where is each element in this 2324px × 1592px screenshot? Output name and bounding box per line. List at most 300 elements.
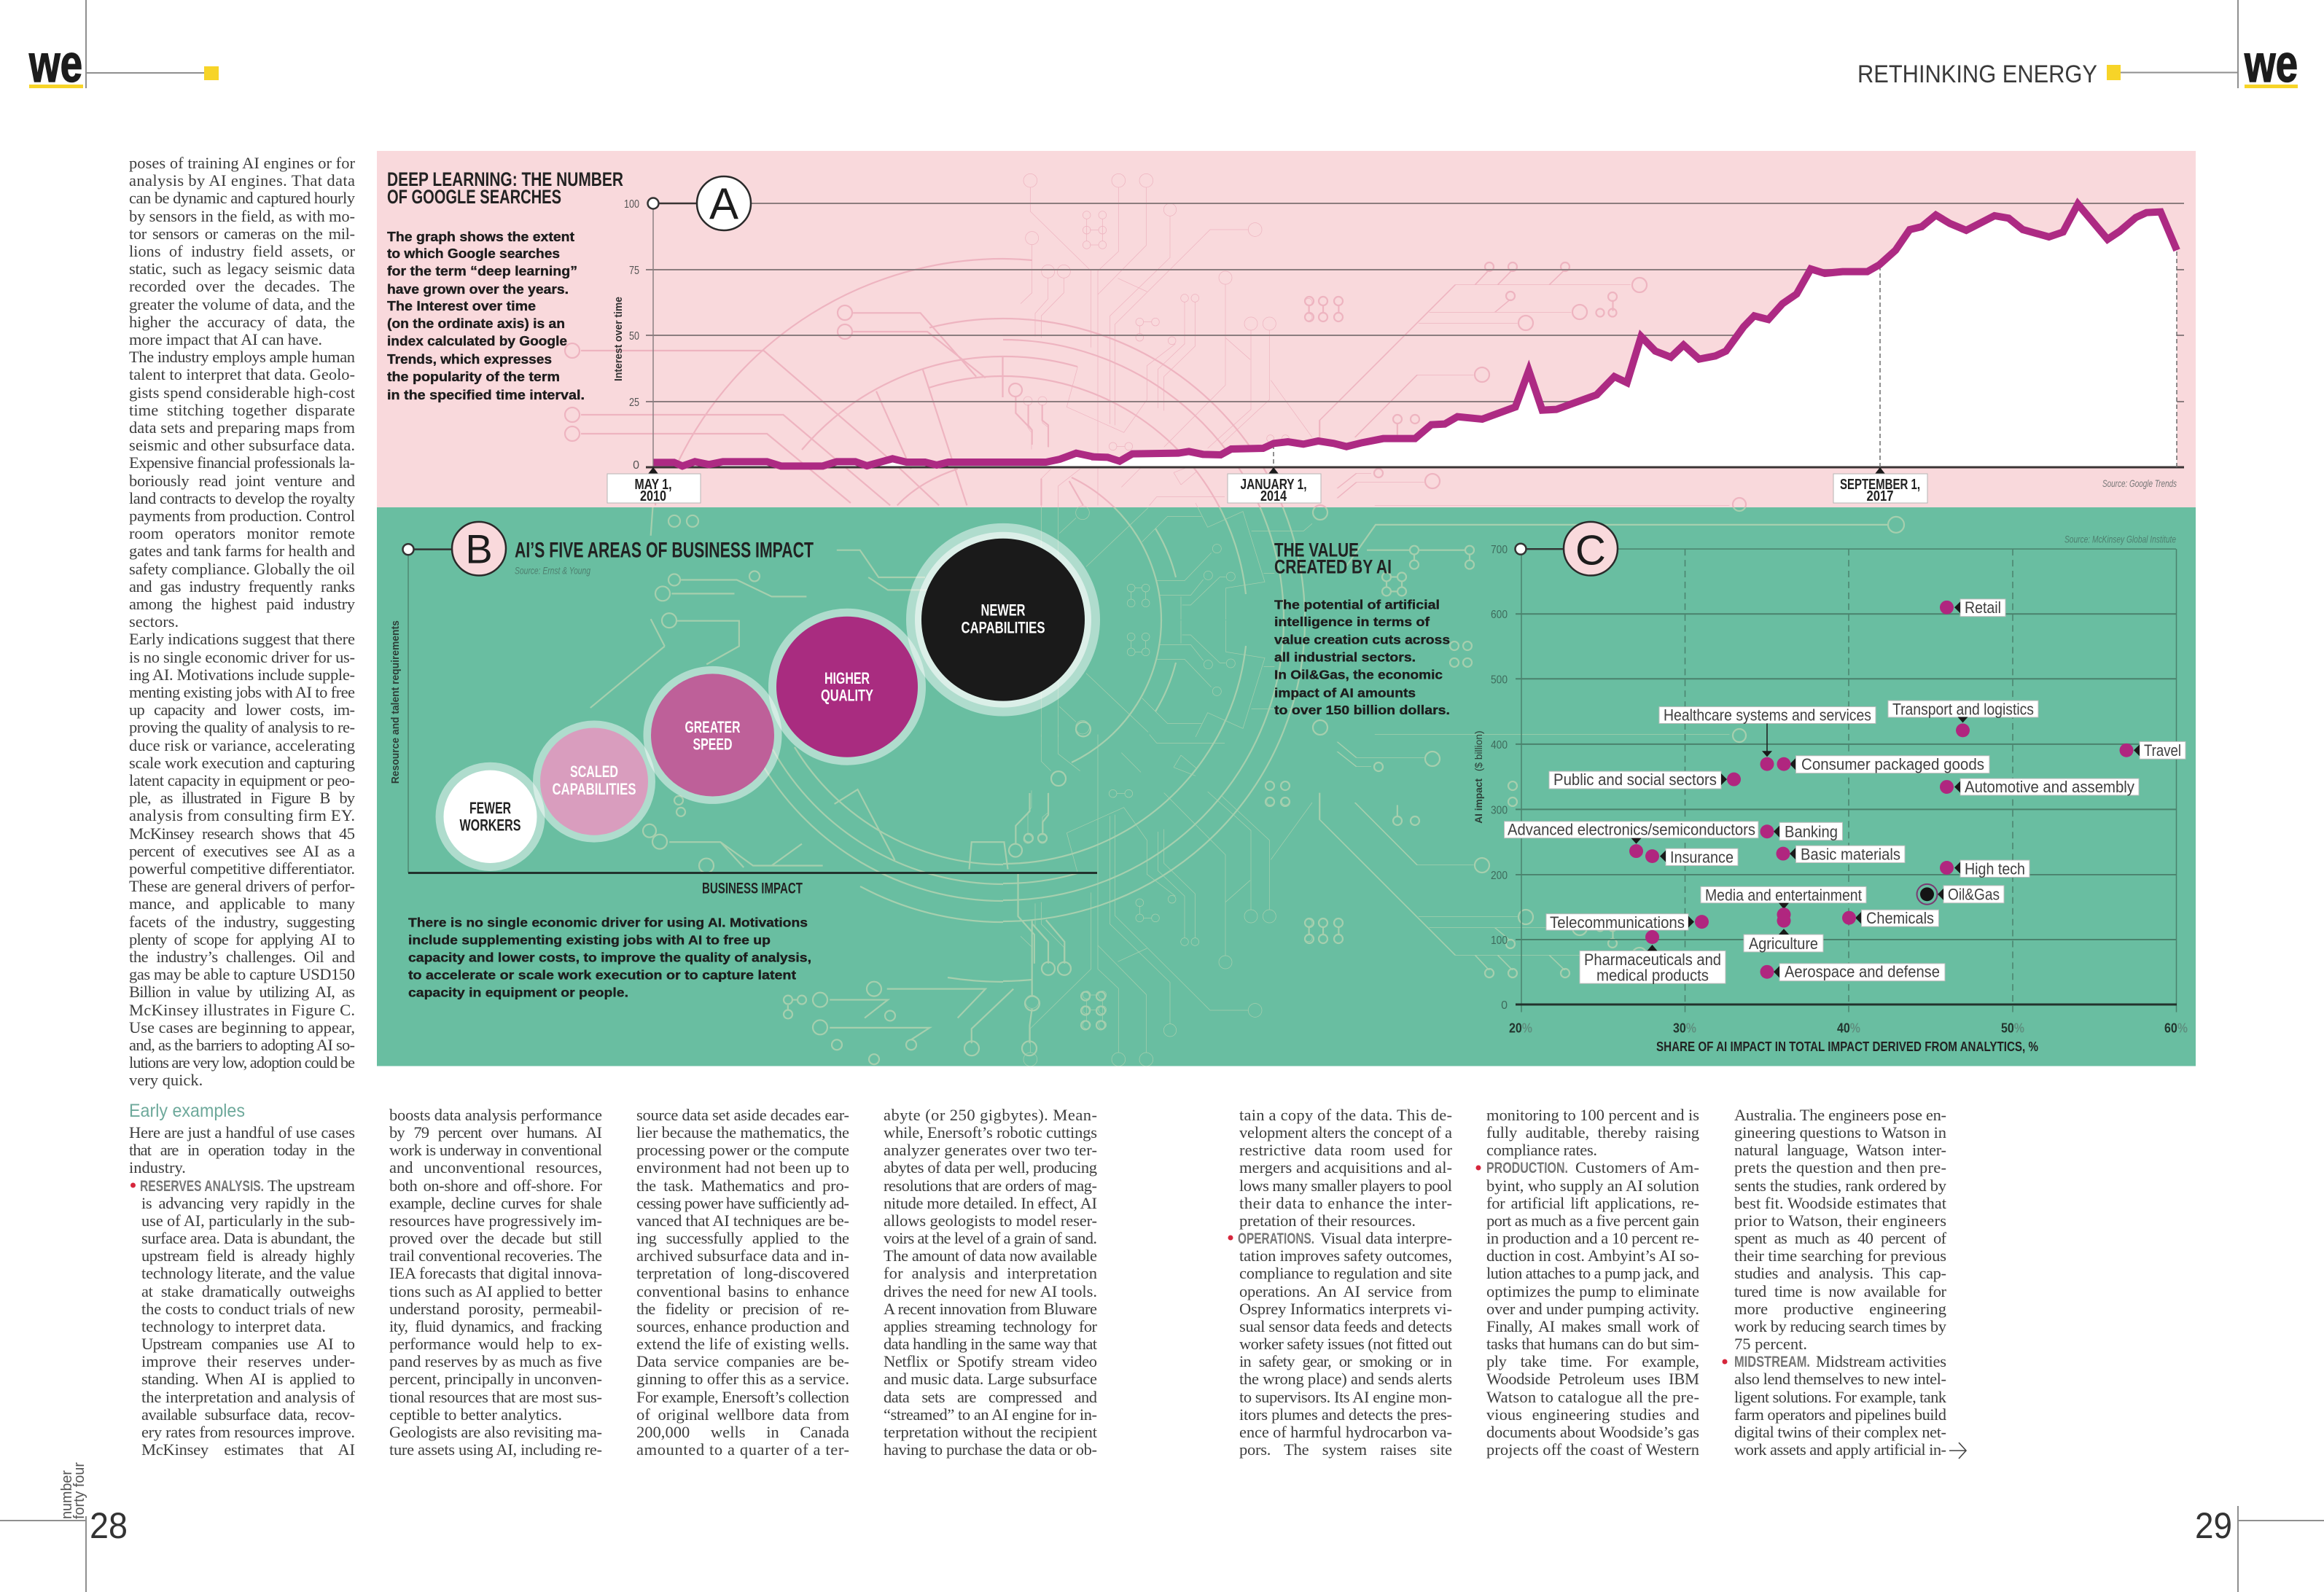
- text column 6: Watson to catalogue all the pre-: [1486, 1388, 1699, 1406]
- text column 2: work is underway in conventional: [389, 1141, 602, 1159]
- text column 3: cessing power have sufficiently ad-: [636, 1194, 849, 1212]
- date label: May 1, 2010: [607, 467, 701, 504]
- text column 1, upper: recorded over the decades. The: [129, 277, 355, 295]
- text column 2: proved over the decade but still: [389, 1229, 602, 1247]
- chart C data labels: medical products: [1596, 967, 1709, 985]
- text column 2: ture assets using AI, including re-: [389, 1440, 602, 1459]
- text column 5: Visual data interpre-: [1320, 1229, 1452, 1247]
- chart C data labels: Aerospace and defense: [1785, 963, 1940, 981]
- text column 1, upper: proving the quality of analysis to re-: [129, 718, 355, 736]
- chart A description text: The Interest over time: [387, 299, 536, 313]
- chart B source note: Source: Ernst & Young: [515, 565, 590, 577]
- chart C data labels: Transport and logistics: [1892, 701, 2034, 719]
- text column 1, lower: that are in operation today in the: [129, 1141, 355, 1159]
- chart A marker circle: [647, 176, 751, 230]
- text column 2: resources have progressively im-: [389, 1211, 602, 1230]
- text column 1, upper: and gas industry frequently ranks: [129, 577, 355, 596]
- text column 6: documents about Woodside’s gas: [1486, 1423, 1699, 1441]
- text column 1, lower: use of AI, particularly in the sub-: [141, 1211, 355, 1230]
- text column 7: digital twins of their complex net-: [1734, 1423, 1946, 1441]
- circuit pattern on pink panel: [565, 173, 1746, 620]
- text column 2: tional resources that are most sus-: [389, 1388, 602, 1406]
- chart C x tick labels: 60%: [2164, 1021, 2188, 1036]
- text column 1, upper: tor sensors or cameras on the mil-: [129, 225, 355, 243]
- text column 7: more productive engineering: [1734, 1300, 1946, 1318]
- chart B description text: [408, 916, 811, 1000]
- chart C heading: [1274, 539, 1392, 577]
- chart A heading: [387, 168, 623, 208]
- text column 7: MIDSTREAM.: [1734, 1354, 1810, 1370]
- chart C highlighted point: oil and gas: [1917, 884, 1938, 905]
- chart B description text: There is no single economic driver for using AI. Motivations: [408, 916, 808, 930]
- text column 4: and music data. Large subsurface: [884, 1370, 1097, 1388]
- chart A description text: (on the ordinate axis) is an: [387, 316, 565, 331]
- text column 1, upper: menting existing jobs with AI to free: [129, 683, 355, 701]
- text column 2: ity, fluid dynamics, and fracking: [389, 1317, 602, 1335]
- text column 1, lower: [129, 1123, 356, 1459]
- chart B description text: to accelerate or scale work execution or to capture latent: [408, 968, 796, 983]
- text column 5: in safety gear, or smoking or in: [1239, 1352, 1452, 1370]
- left footer: issue label, page number 28: forty four: [71, 1462, 87, 1519]
- text column 2: percent, principally in unconven-: [389, 1370, 602, 1388]
- chart A description text: have grown over the years.: [387, 282, 569, 297]
- chart C description text: The potential of artificial: [1274, 597, 1440, 612]
- bubble: newer capabilities: CAPABILITIES: [961, 619, 1045, 637]
- text column 1, upper: plenty of scope for applying AI to: [129, 930, 355, 948]
- chart C description text: In Oil&Gas, the economic: [1274, 667, 1443, 682]
- text column 1, upper: lions of industry field assets, or: [129, 242, 356, 260]
- text column 1, upper: static, such as legacy seismic data: [129, 260, 355, 278]
- chart A heading: OF GOOGLE SEARCHES: [387, 186, 561, 208]
- text column 1, lower: technology literate, and the value: [141, 1264, 355, 1282]
- chart A description text: to which Google searches: [387, 246, 560, 261]
- text column 2: trail conventional recoveries. The: [389, 1246, 602, 1265]
- text column 7: sents the studies, rank ordered by: [1734, 1177, 1947, 1195]
- text column 1, upper: gates and tank farms for health and: [129, 542, 355, 560]
- text column 1, upper: is no single economic driver for us-: [129, 648, 355, 666]
- chart A y tick labels: 75: [629, 265, 639, 277]
- text column 1, lower: surface area. Data is abundant, the: [141, 1229, 355, 1247]
- text column 6: monitoring to 100 percent and is: [1486, 1106, 1699, 1124]
- text column 1, lower: the costs to conduct trials of new: [141, 1300, 356, 1318]
- text column 7: farm operators and pipelines build: [1734, 1405, 1946, 1424]
- text column 1, upper: payments from production. Control: [129, 507, 355, 525]
- text column 1, upper: and, as the barriers to adopting AI so-: [129, 1036, 355, 1054]
- chart A data line: [654, 204, 2177, 466]
- text column 1, upper: very quick.: [129, 1071, 203, 1089]
- text column 6: optimizes the pump to eliminate: [1486, 1282, 1699, 1300]
- text column 3: of original wellbore data from: [636, 1405, 849, 1424]
- text column 3: ing successfully applied to the: [636, 1229, 849, 1247]
- text column 5: Osprey Informatics interprets vi-: [1239, 1300, 1452, 1318]
- date label: January 1, 2014: [1228, 467, 1321, 504]
- chart C description text: intelligence in terms of: [1274, 614, 1430, 629]
- chart C y axis title: AI impact: [1473, 779, 1484, 824]
- right header: section title, logo and rule: [1857, 0, 2298, 93]
- date label: January 1, 2014: 2014: [1260, 488, 1287, 504]
- text column 1, lower: upstream field is already highly: [141, 1246, 356, 1265]
- text column 7: work by reducing search times by: [1734, 1317, 1947, 1335]
- text column 1, upper: talent to interpret that data. Geolo-: [129, 365, 355, 383]
- text column 2: IEA forecasts that digital innova-: [389, 1264, 602, 1282]
- text column 6: tasks that humans can do but sim-: [1486, 1335, 1699, 1353]
- text column 1, upper: safety compliance. Globally the oil: [129, 560, 355, 578]
- chart A y tick labels: 100: [624, 198, 639, 211]
- text column 1, upper: among the highest paid industry: [129, 595, 356, 613]
- bubble: newer capabilities: NEWER: [980, 601, 1026, 620]
- chart C x tick labels: 20%: [1509, 1021, 1532, 1036]
- arrow: text continues: [1949, 1443, 1966, 1459]
- chart C data labels: Healthcare systems and services: [1664, 706, 1871, 724]
- chart A description text: [387, 230, 585, 402]
- left footer: issue label, page number 28: number: [59, 1470, 75, 1519]
- chart A y tick labels: 25: [629, 397, 639, 409]
- text column 3: conventional basins to enhance: [636, 1282, 849, 1300]
- text column 5: mergers and acquisitions and al-: [1239, 1158, 1452, 1177]
- text column 1, upper: The industry employs ample human: [129, 348, 355, 366]
- chart C data labels: Travel: [2144, 741, 2181, 760]
- chart B heading: AI’S FIVE AREAS OF BUSINESS IMPACT: [515, 539, 814, 563]
- text column 1, lower: McKinsey estimates that AI: [141, 1440, 355, 1459]
- chart A heading: DEEP LEARNING: THE NUMBER: [387, 168, 623, 190]
- text column 1, upper: Use cases are beginning to appear,: [129, 1018, 355, 1037]
- text column 1, lower: Here are just a handful of use cases: [129, 1123, 355, 1142]
- bubble: higher quality: QUALITY: [821, 687, 873, 705]
- bubble: greater speed: [643, 666, 781, 804]
- text column 4: abytes of data per well, producing: [884, 1158, 1097, 1177]
- text column 5: velopment alters the concept of a: [1239, 1123, 1452, 1142]
- text column 4: The amount of data now available: [884, 1246, 1097, 1265]
- text column 6: over and under pumping activity.: [1486, 1300, 1699, 1318]
- text column 1, lower: technology to interpret data.: [141, 1317, 326, 1335]
- left footer: issue label, page number 28: [0, 1462, 128, 1592]
- chart C heading: THE VALUE: [1274, 539, 1359, 561]
- text column 3: environment had not been up to: [636, 1158, 849, 1177]
- text column 6: Customers of Am-: [1575, 1158, 1699, 1177]
- text column 1, lower: ery rates from resources improve.: [141, 1423, 355, 1441]
- chart C y tick labels: 100: [1491, 934, 1508, 947]
- chart C data labels: Advanced electronics/semiconductors: [1508, 821, 1755, 839]
- text column 5: [1228, 1106, 1453, 1459]
- text column 7: Australia. The engineers pose en-: [1734, 1106, 1946, 1124]
- text column 7: prior to Watson, their engineers: [1734, 1211, 1946, 1230]
- text column 7: gineering questions to Watson in: [1734, 1123, 1946, 1142]
- chart A y tick labels: 50: [629, 330, 639, 343]
- text column 1, upper: data sets and preparing maps from: [129, 418, 355, 437]
- bubble: greater speed: SPEED: [693, 735, 732, 753]
- text column 1, upper: poses of training AI engines or for: [129, 154, 356, 172]
- right header: section title, logo and rule: RETHINKING ENERGY: [1857, 61, 2097, 88]
- chart C y tick labels: 700: [1491, 544, 1508, 556]
- text column 5: compliance to regulation and site: [1239, 1264, 1452, 1282]
- text column 1, upper: ple, as illustrated in Figure B by: [129, 789, 356, 807]
- text column 1, upper: [129, 154, 356, 1089]
- bubble: scaled capabilities: [533, 720, 655, 843]
- chart A date guide lines: [1274, 251, 2177, 467]
- text column 5: the wrong place) and sends alerts: [1239, 1370, 1452, 1388]
- chart B marker circle: [402, 522, 506, 576]
- chart C marker circle: C: [1575, 528, 1606, 574]
- text column 5: sual sensor data feeds and detects: [1239, 1317, 1452, 1335]
- text column 6: in production and a 10 percent re-: [1486, 1229, 1699, 1247]
- chart B y axis title: Resource and talent requirements: [389, 620, 402, 784]
- chart A axes: [646, 203, 2184, 467]
- chart A area fill: [654, 204, 2177, 467]
- chart A description text: in the specified time interval.: [387, 388, 585, 402]
- chart C data labels: Media and entertainment: [1705, 886, 1862, 904]
- panel: green chart background: [377, 507, 2196, 1066]
- text column 1, upper: McKinsey research shows that 45: [129, 824, 355, 843]
- chart B description text: include supplementing existing jobs with AI to free up: [408, 932, 771, 947]
- left footer: issue label, page number 28: 28: [90, 1505, 128, 1546]
- right footer: page number 29: 29: [2195, 1505, 2232, 1546]
- text column 1, upper: gists spend considerable high-cost: [129, 383, 356, 402]
- left header: logo and rule: we: [28, 35, 82, 93]
- text column 3: processing power or the compute: [636, 1141, 849, 1159]
- text column 1, upper: analysis by AI engines. That data: [129, 171, 355, 190]
- chart C y tick labels: [1491, 544, 1508, 1012]
- text column 1, lower: is advancing very rapidly in the: [141, 1194, 355, 1212]
- chart C description text: all industrial sectors.: [1274, 649, 1416, 664]
- text column 5: tain a copy of the data. This de-: [1239, 1106, 1452, 1124]
- chart C data labels: Automotive and assembly: [1965, 778, 2134, 796]
- text column 1, upper: ing AI. Motivations include supple-: [129, 666, 355, 684]
- chart C y tick labels: 600: [1491, 609, 1508, 621]
- text column 2: both on-shore and off-shore. For: [389, 1177, 602, 1195]
- chart C x axis title: SHARE OF AI IMPACT IN TOTAL IMPACT DERIVED FROM ANALYTICS, %: [1656, 1039, 2038, 1055]
- chart C data labels: Insurance: [1670, 848, 1734, 867]
- chart C y tick labels: 200: [1491, 870, 1508, 882]
- text column 2: ceptible to better analytics.: [389, 1405, 562, 1424]
- chart C heading: CREATED BY AI: [1274, 556, 1392, 577]
- chart B: five areas of business impact: [389, 522, 1100, 897]
- text column 3: terpretation of long-discovered: [636, 1264, 849, 1282]
- text column 4: “streamed” to an AI engine for in-: [884, 1405, 1097, 1424]
- text column 1, upper: analysis from consulting firm EY.: [129, 806, 355, 824]
- bubble: fewer workers: FEWER: [469, 799, 511, 817]
- text column 5: tation improves safety outcomes,: [1239, 1246, 1452, 1265]
- text column 2: and unconventional resources,: [389, 1158, 602, 1177]
- text column 3: Data service companies are be-: [636, 1352, 849, 1370]
- text column 6: Finally, AI makes small work of: [1486, 1317, 1700, 1335]
- bubble: scaled capabilities: SCALED: [570, 762, 618, 781]
- text column 4: Netflix or Spotify stream video: [884, 1352, 1097, 1370]
- text column 2: tions such as AI applied to better: [389, 1282, 602, 1300]
- chart C data labels: Public and social sectors: [1553, 770, 1717, 789]
- text column 1, upper: mance, and applicable to many: [129, 894, 356, 913]
- text column 1, upper: percent of executives see AI as a: [129, 842, 355, 860]
- text column 3: [636, 1106, 849, 1459]
- chart A source note: Source: Google Trends: [2102, 477, 2177, 489]
- chart C leader arrows: [1631, 601, 2140, 978]
- subheading: Early examples: Early examples: [129, 1101, 245, 1121]
- text column 5: pretation of their resources.: [1239, 1211, 1416, 1230]
- text column 1, lower: at stake dramatically outweighs: [141, 1282, 355, 1300]
- chart C grid: [1516, 549, 2177, 1012]
- text column 4: drives the need for new AI tools.: [884, 1282, 1097, 1300]
- text column 1, upper: latent capacity in equipment or peo-: [129, 771, 355, 789]
- chart C y tick labels: 0: [1501, 999, 1508, 1012]
- text column 6: for artificial lift applications, re-: [1486, 1194, 1699, 1212]
- text column 4: nitude more detailed. In effect, AI: [884, 1194, 1097, 1212]
- chart C x tick labels: 50%: [2001, 1021, 2024, 1036]
- chart C description text: value creation cuts across: [1274, 633, 1450, 647]
- text column 6: vious engineering studies and: [1486, 1405, 1699, 1424]
- text column 1, lower: improve their reserves under-: [141, 1352, 355, 1370]
- text column 6: fully auditable, thereby raising: [1486, 1123, 1699, 1142]
- chart C description text: to over 150 billion dollars.: [1274, 703, 1450, 717]
- text column 5: restrictive data room used for: [1239, 1141, 1452, 1159]
- text column 1, upper: Early indications suggest that there: [129, 630, 355, 648]
- text column 1, upper: greater the volume of data, and the: [129, 295, 355, 313]
- date label: September 1, 2017: [1833, 467, 1927, 504]
- chart C zero axis: [1516, 1004, 2177, 1006]
- chart A y axis title: Interest over time: [612, 297, 625, 381]
- bubble: fewer workers: WORKERS: [459, 816, 520, 835]
- text column 1, lower: Upstream companies use AI to: [141, 1335, 355, 1353]
- chart B x axis title: BUSINESS IMPACT: [702, 880, 803, 897]
- text column 5: OPERATIONS.: [1238, 1230, 1314, 1247]
- text column 6: [1475, 1106, 1700, 1459]
- date label: January 1, 2014: JANUARY 1,: [1241, 477, 1306, 493]
- bubble: greater speed: GREATER: [685, 718, 741, 736]
- chart C data labels: High tech: [1965, 859, 2025, 878]
- text column 3: lier because the mathematics, the: [636, 1123, 849, 1142]
- chart C y tick labels: 500: [1491, 674, 1508, 686]
- text column 1, upper: by sensors in the field, as with mo-: [129, 207, 355, 225]
- text column 7: prets the question and then pre-: [1734, 1158, 1946, 1177]
- chart C data labels: Retail: [1965, 598, 2001, 617]
- chart B marker circle: B: [465, 526, 493, 572]
- text column 1, upper: time stitching together disparate: [129, 401, 355, 419]
- chart A grid lines: [646, 203, 2184, 402]
- text column 1, upper: more impact that AI can have.: [129, 330, 322, 348]
- text column 1, upper: higher the accuracy of data, the: [129, 313, 355, 331]
- panel: pink chart background: [377, 151, 2196, 507]
- text column 2: Geologists are also revisiting ma-: [389, 1423, 602, 1441]
- text column 2: pand reserves by as much as five: [389, 1352, 602, 1370]
- text column 1, upper: boriously read joint venture and: [129, 472, 355, 490]
- date label: May 1, 2010: 2010: [640, 488, 666, 504]
- text column 1, upper: the industry’s challenges. Oil and: [129, 948, 355, 966]
- text column 5: operations. An AI service from: [1239, 1282, 1452, 1300]
- chart A marker circle: A: [709, 179, 738, 228]
- text column 5: pors. The system raises site: [1239, 1440, 1452, 1459]
- text column 5: their data to enhance the inter-: [1239, 1194, 1452, 1212]
- chart C data labels: [1505, 598, 2185, 985]
- text column 3: source data set aside decades ear-: [636, 1106, 849, 1124]
- date label: September 1, 2017: 2017: [1866, 488, 1894, 504]
- text column 6: port as much as a five percent gain: [1486, 1211, 1699, 1230]
- chart C x tick labels: 40%: [1837, 1021, 1860, 1036]
- text column 2: boosts data analysis performance: [389, 1106, 602, 1124]
- text column 5: ence of harmful hydrocarbon va-: [1239, 1423, 1452, 1441]
- chart C y axis title: ($ billion): [1473, 730, 1484, 771]
- text column 1, lower: the interpretation and analysis of: [141, 1388, 356, 1406]
- chart A description text: The graph shows the extent: [387, 230, 574, 244]
- chart A description text: for the term “deep learning”: [387, 264, 577, 278]
- text column 7: [1722, 1106, 1947, 1459]
- text column 4: [884, 1106, 1098, 1459]
- text column 7: work assets and apply artificial in-: [1734, 1440, 1946, 1459]
- text column 7: best fit. Woodside estimates that: [1734, 1194, 1947, 1212]
- text column 3: extend the life of existing wells.: [636, 1335, 849, 1353]
- text column 3: the task. Mathematics and pro-: [636, 1177, 849, 1195]
- text column 4: data handling in the same way that: [884, 1335, 1098, 1353]
- text column 1, upper: scale work execution and capturing: [129, 754, 355, 772]
- text column 3: For example, Enersoft’s collection: [636, 1388, 849, 1406]
- chart C marker circle: [1515, 522, 1618, 576]
- text column 4: for analysis and interpretation: [884, 1264, 1097, 1282]
- chart A description text: index calculated by Google: [387, 334, 567, 348]
- chart C y tick labels: 300: [1491, 804, 1508, 816]
- text column 4: while, Enersoft’s robotic cuttings: [884, 1123, 1097, 1142]
- text column 1, upper: can be dynamic and captured hourly: [129, 189, 356, 207]
- text column 7: tured time is now available for: [1734, 1282, 1946, 1300]
- text column 4: voirs at the level of a grain of sand.: [884, 1229, 1097, 1247]
- chart C description text: impact of AI amounts: [1274, 686, 1416, 701]
- text column 5: to supervisors. Its AI engine mon-: [1239, 1388, 1452, 1406]
- chart C y axis title: [1473, 730, 1484, 824]
- text column 4: terpretation without the recipient: [884, 1423, 1098, 1441]
- text column 6: lution attaches to a pump jack, and: [1486, 1264, 1699, 1282]
- chart C data labels: Consumer packaged goods: [1801, 755, 1984, 773]
- text column 1, lower: available subsurface data, recov-: [141, 1405, 355, 1424]
- chart C data labels: Agriculture: [1749, 934, 1818, 953]
- text column 5: worker safety issues (not fitted out: [1239, 1335, 1453, 1353]
- text column 1, lower: standing. When AI is applied to: [141, 1370, 355, 1388]
- text column 1, upper: Billion in value by utilizing AI, as: [129, 983, 355, 1001]
- text column 1, upper: powerful competitive differentiator.: [129, 859, 355, 878]
- right header: section title, logo and rule: we: [2244, 35, 2298, 93]
- text column 1, upper: sectors.: [129, 612, 179, 631]
- text column 7: natural language, Watson inter-: [1734, 1141, 1946, 1159]
- bubble: newer capabilities: [906, 523, 1100, 717]
- text column 7: 75 percent.: [1734, 1335, 1807, 1353]
- bubble: higher quality: [768, 609, 926, 765]
- text column 2: example, decline curves for shale: [389, 1194, 602, 1212]
- text column 7: spent as much as 40 percent of: [1734, 1229, 1946, 1247]
- text column 6: projects off the coast of Western: [1486, 1440, 1699, 1459]
- text column 2: [389, 1106, 602, 1459]
- text column 7: their time searching for previous: [1734, 1246, 1946, 1265]
- text column 1, upper: McKinsey illustrates in Figure C.: [129, 1001, 355, 1019]
- chart C: AI value scatter plot: [1473, 522, 2188, 1055]
- text column 1, lower: The upstream: [268, 1177, 355, 1195]
- text column 6: compliance rates.: [1486, 1141, 1597, 1159]
- text column 7: studies and analysis. This cap-: [1734, 1264, 1946, 1282]
- text column 1, upper: room operators monitor remote: [129, 524, 355, 542]
- text column 2: performance would help to ex-: [389, 1335, 602, 1353]
- text column 1, upper: up capacity and lower costs, im-: [129, 701, 355, 719]
- left header: logo and rule: [28, 0, 219, 93]
- text column 1, lower: industry.: [129, 1158, 186, 1177]
- text column 6: duction in cost. Ambyint’s AI so-: [1486, 1246, 1699, 1265]
- text column 4: resolutions that are orders of mag-: [884, 1177, 1097, 1195]
- text column 6: PRODUCTION.: [1486, 1160, 1568, 1177]
- chart C data labels: Chemicals: [1866, 909, 1934, 927]
- text column 6: Woodside Petroleum uses IBM: [1486, 1370, 1699, 1388]
- text column 4: analyzer generates over two ter-: [884, 1141, 1097, 1159]
- chart A: Google searches line chart: [607, 176, 2184, 504]
- bubble: scaled capabilities: CAPABILITIES: [552, 780, 636, 798]
- circuit pattern on green panel: [590, 173, 1904, 1066]
- chart A description text: Trends, which expresses: [387, 352, 552, 367]
- text column 1, upper: duce risk or variance, accelerating: [129, 736, 355, 754]
- chart C data points: [1629, 601, 2133, 979]
- chart C data labels: Pharmaceuticals and: [1584, 951, 1721, 969]
- text column 1, upper: Expensive financial professionals la-: [129, 453, 355, 472]
